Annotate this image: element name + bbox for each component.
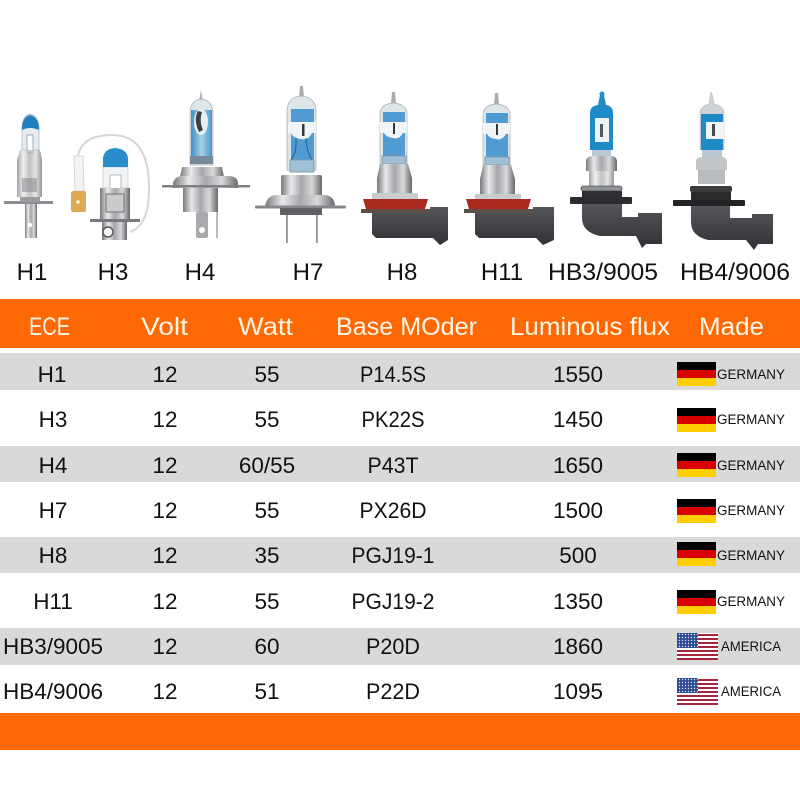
row: HB4/9006: 51 <box>254 679 280 704</box>
row: HB3/9005: HB3/9005 <box>3 634 103 659</box>
row: H7: GERMANY <box>717 503 785 518</box>
row: H11: 12 <box>152 589 178 614</box>
table header bar: Luminous flux <box>510 313 671 341</box>
row: H1: 1550 <box>553 362 603 387</box>
row: HB4/9006: P22D <box>366 679 420 704</box>
bulb: H11 <box>464 93 554 245</box>
row: H7 <box>39 498 785 523</box>
bulb: H7 <box>255 86 346 243</box>
row: HB3/9005 <box>0 628 800 665</box>
row: H8: 35 <box>254 543 280 568</box>
bulb labels: H3 <box>98 259 128 286</box>
row: H11: 1350 <box>553 589 603 614</box>
row: H7: 55 <box>254 498 280 523</box>
row: H1 <box>0 353 800 390</box>
bulb: H3 <box>71 135 149 240</box>
table header bar: Watt <box>238 313 293 341</box>
row: H3: PK22S <box>362 407 424 432</box>
table header bar: Volt <box>141 313 188 341</box>
row: H4: H4 <box>39 453 67 478</box>
row: H8: PGJ19-1 <box>352 543 434 568</box>
bulb: H8 <box>361 92 448 245</box>
row: H11: PGJ19-2 <box>352 589 434 614</box>
table footer bar <box>0 713 800 750</box>
bulb labels: HB4/9006 <box>680 259 790 286</box>
row: HB3/9005: 60 <box>254 634 280 659</box>
row: HB3/9005: 1860 <box>553 634 603 659</box>
row: H1: GERMANY <box>717 367 785 382</box>
row: HB4/9006: 12 <box>152 679 178 704</box>
row: H8 <box>0 537 800 573</box>
row: H4: 1650 <box>553 453 603 478</box>
row: H4: GERMANY <box>717 458 785 473</box>
row: H1: H1 <box>38 362 66 387</box>
bulb: H4 <box>162 90 250 238</box>
row: H1: P14.5S <box>360 362 426 387</box>
row: H4: 12 <box>152 453 178 478</box>
bulb: HB3/9005 <box>570 92 662 248</box>
row: H4: 60/55 <box>239 453 295 478</box>
table header bar: Base MOder <box>336 313 477 341</box>
row: H3: GERMANY <box>717 412 785 427</box>
table header bar <box>0 299 800 348</box>
row: H11: GERMANY <box>717 594 785 609</box>
bulb labels: H8 <box>387 259 417 286</box>
row: H7: 12 <box>152 498 178 523</box>
bulb: HB4/9006 <box>673 92 773 250</box>
row: H7: 1500 <box>553 498 603 523</box>
row: H8: GERMANY <box>717 548 785 563</box>
bulb labels: H11 <box>481 259 523 286</box>
row: H4 <box>0 446 800 482</box>
table header bar: Made <box>699 313 764 341</box>
row: H11: 55 <box>254 589 280 614</box>
row: H11: H11 <box>33 589 73 614</box>
row: HB3/9005: AMERICA <box>721 639 781 654</box>
row: H3: 12 <box>152 407 178 432</box>
row: H1: 55 <box>254 362 280 387</box>
bulb labels: H7 <box>293 259 323 286</box>
row: H8: 12 <box>152 543 178 568</box>
row: H7: PX26D <box>360 498 426 523</box>
row: H4: P43T <box>368 453 419 478</box>
row: H3: 1450 <box>553 407 603 432</box>
row: H7: H7 <box>39 498 67 523</box>
bulb: H1 <box>4 114 53 238</box>
row: HB4/9006: HB4/9006 <box>3 679 103 704</box>
bulb labels: H4 <box>185 259 215 286</box>
row: H3: H3 <box>39 407 67 432</box>
row: HB3/9005: 12 <box>152 634 178 659</box>
row: H8: H8 <box>39 543 67 568</box>
row: H3 <box>39 407 785 432</box>
bulb labels: HB3/9005 <box>548 259 658 286</box>
row: HB4/9006: AMERICA <box>721 684 781 699</box>
table header bar: ECE <box>29 313 70 341</box>
row: H3: 55 <box>254 407 280 432</box>
row: H11 <box>33 589 785 614</box>
bulb labels <box>17 259 790 286</box>
row: HB4/9006 <box>3 678 781 705</box>
row: HB4/9006: 1095 <box>553 679 603 704</box>
row: H1: 12 <box>152 362 178 387</box>
row: H8: 500 <box>559 543 597 568</box>
row: HB3/9005: P20D <box>366 634 420 659</box>
bulb labels: H1 <box>17 259 47 286</box>
